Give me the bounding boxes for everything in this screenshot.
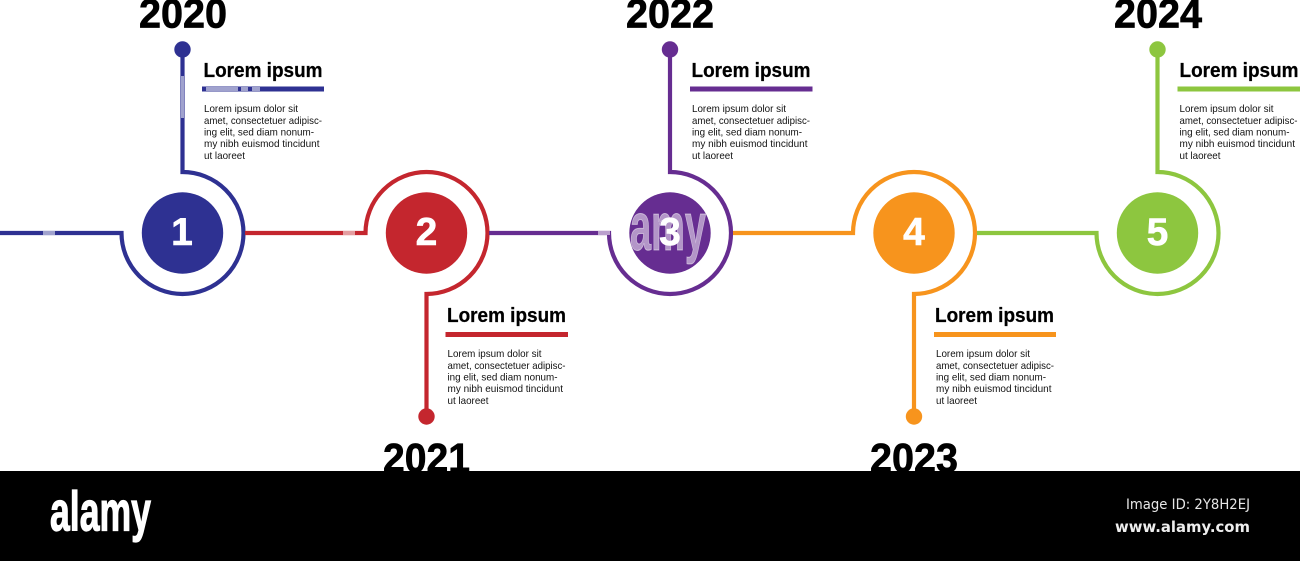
heading 2: Lorem ipsum (447, 305, 566, 327)
number 3: 3 (659, 211, 681, 254)
dot 3 (662, 41, 678, 58)
image id: Image ID: 2Y8H2EJ (1126, 497, 1250, 513)
body text 5: ing elit, sed diam nonum- (1180, 126, 1290, 138)
connector line and ring 2 (245, 172, 488, 416)
panel: step 5 (2024) (977, 0, 1300, 294)
underline 3 (690, 86, 812, 92)
number 1: 1 (171, 211, 193, 254)
body text 5 (1180, 103, 1298, 162)
body text 5: ut laoreet (1180, 150, 1221, 162)
number 2: 2 (416, 211, 437, 254)
badge 4 (873, 192, 955, 274)
body text 2: my nibh euismod tincidunt (448, 383, 563, 395)
body text 4: Lorem ipsum dolor sit (936, 348, 1030, 360)
body text 1: my nibh euismod tincidunt (204, 138, 320, 150)
body text 4: ing elit, sed diam nonum- (936, 372, 1046, 384)
dot 5 (1149, 41, 1166, 58)
year 2023: 2023 (870, 435, 958, 481)
body text 2: amet, consectetuer adipisc- (448, 360, 566, 372)
panel: step 3 (2022) (489, 0, 812, 294)
body text 3: ing elit, sed diam nonum- (692, 126, 802, 138)
number 5: 5 (1147, 211, 1168, 254)
underline 2 (446, 332, 568, 337)
underline 1 (202, 86, 324, 92)
connector line and ring 5 (977, 50, 1218, 294)
body text 3 (692, 103, 810, 162)
heading 3: Lorem ipsum (692, 60, 810, 82)
body text 4: amet, consectetuer adipisc- (936, 360, 1054, 372)
panel: step 1 (2020) (0, 0, 324, 294)
connector line and ring 4 (733, 172, 975, 416)
body text 2: ing elit, sed diam nonum- (448, 372, 558, 384)
body text 3: amet, consectetuer adipisc- (692, 115, 810, 127)
body text 1: ing elit, sed diam nonum- (204, 126, 314, 138)
body text 4 (936, 348, 1054, 407)
heading 1: Lorem ipsum (204, 60, 322, 82)
badge 1 (142, 192, 223, 274)
alamy logo: alamy (50, 480, 151, 542)
body text 2 (448, 348, 566, 407)
badge 5 (1117, 192, 1198, 274)
body text 1: Lorem ipsum dolor sit (204, 103, 298, 115)
body text 4: ut laoreet (936, 395, 977, 407)
dot 1 (174, 41, 191, 58)
body text 3: Lorem ipsum dolor sit (692, 103, 786, 115)
panel: step 2 (2021) (245, 172, 568, 481)
body text 3: ut laoreet (692, 150, 733, 162)
body text 1: amet, consectetuer adipisc- (204, 115, 322, 127)
body text 5: my nibh euismod tincidunt (1180, 138, 1295, 150)
body text 2: ut laoreet (448, 395, 489, 407)
body text 1: ut laoreet (204, 150, 245, 162)
body text 1 (204, 103, 322, 162)
badge 2 (386, 192, 467, 274)
website: www.alamy.com (1115, 518, 1250, 536)
dot 4 (906, 408, 922, 425)
footer band (0, 471, 1300, 561)
body text 2: Lorem ipsum dolor sit (448, 348, 542, 360)
body text 5: Lorem ipsum dolor sit (1180, 103, 1274, 115)
watermark on badge 3: amy (630, 189, 706, 265)
connector line and ring 1 (0, 50, 244, 294)
year 2021: 2021 (383, 435, 470, 481)
panel: step 4 (2023) (733, 172, 1056, 481)
connector line and ring 3 (489, 50, 731, 294)
dot 2 (418, 408, 435, 425)
underline 5 (1178, 86, 1300, 92)
body text 3: my nibh euismod tincidunt (692, 138, 808, 150)
badge 3 (629, 192, 711, 274)
number 4: 4 (903, 211, 925, 254)
heading 4: Lorem ipsum (935, 305, 1054, 327)
underline 4 (934, 332, 1056, 337)
body text 4: my nibh euismod tincidunt (936, 383, 1052, 395)
